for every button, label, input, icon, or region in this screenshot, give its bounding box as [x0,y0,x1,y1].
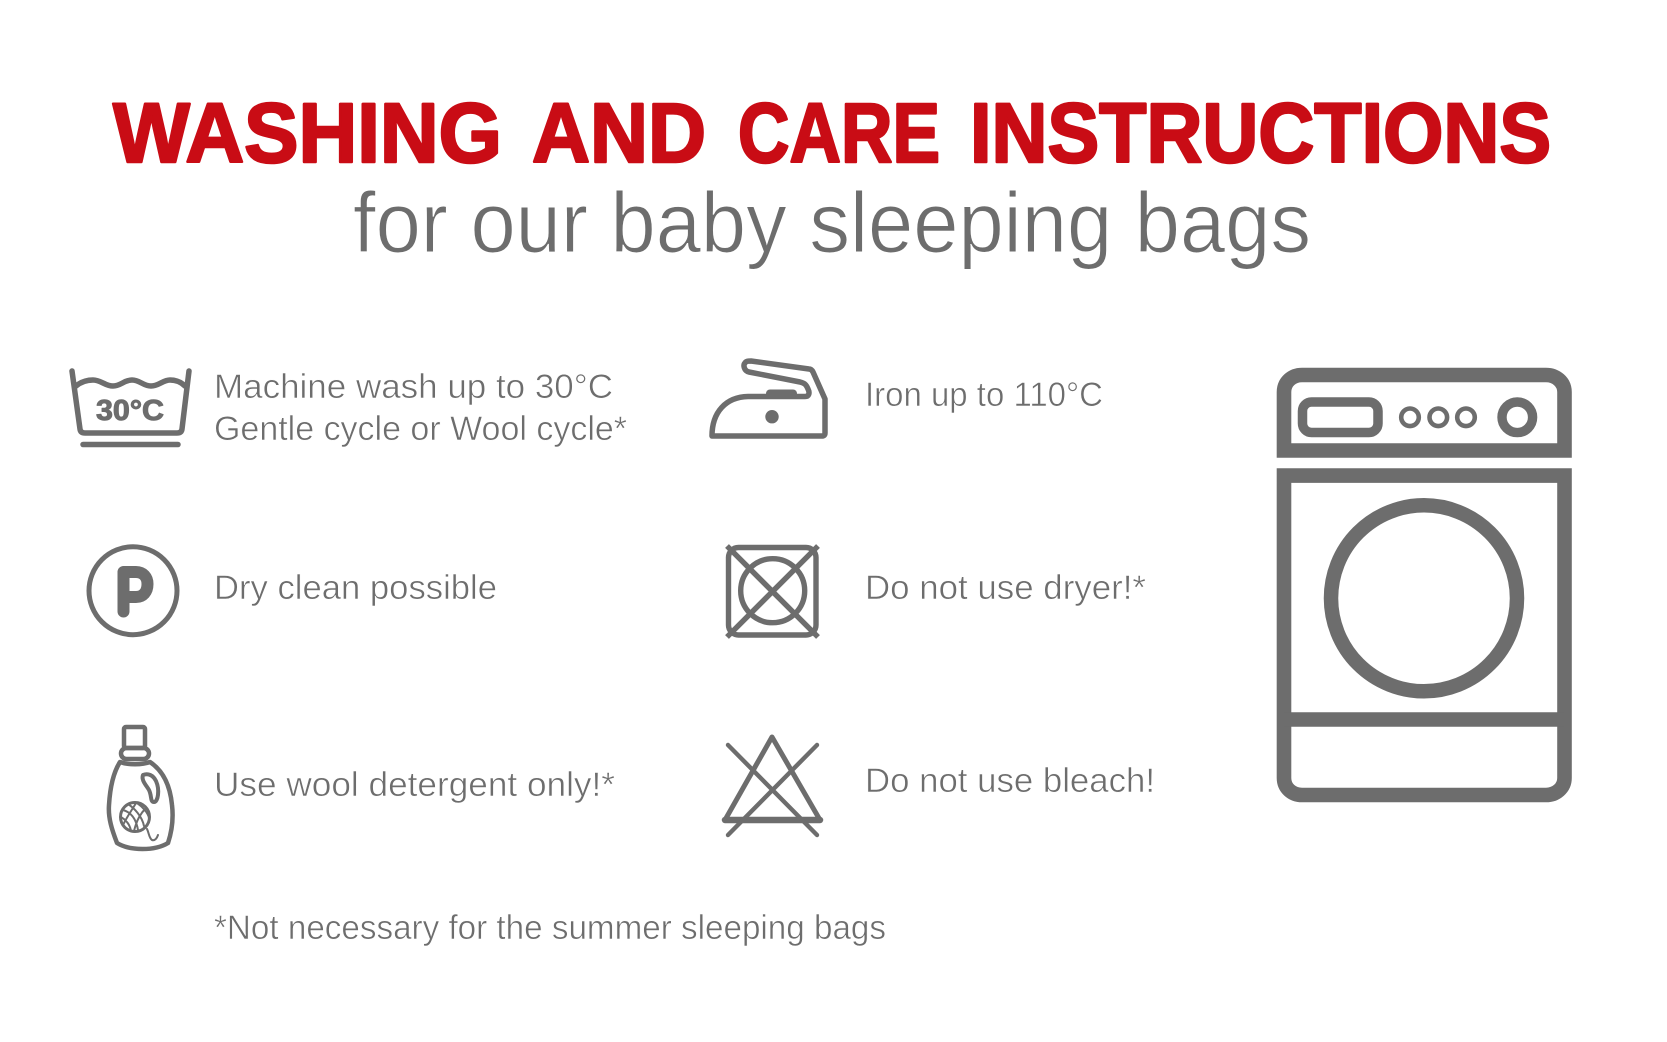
icon: wash tub 30°C [72,371,189,444]
subtitle: for our baby sleeping bags [353,176,1311,271]
footnote: *Not necessary for the summer sleeping bags [214,909,886,947]
icon: wool detergent bottle [109,727,173,849]
icon: iron [712,361,825,436]
text: machine wash [214,368,627,448]
title: CARE [738,86,940,180]
title: AND [532,86,706,180]
text: machine wash: Machine wash up to 30°C [214,368,613,406]
icon: no bleach [725,737,820,835]
title [113,86,1551,180]
text: iron: Iron up to 110°C [865,376,1103,414]
text: machine wash: Gentle cycle or Wool cycle* [214,410,627,448]
icon: no dryer [727,546,818,637]
text: wool detergent: Use wool detergent only!* [214,766,615,804]
text: dry clean: Dry clean possible [214,569,497,607]
icon: wash tub 30°C: 30°C [96,395,164,427]
icon: washing machine [1284,375,1564,795]
text: no bleach: Do not use bleach! [865,762,1155,800]
title: INSTRUCTIONS [970,86,1551,180]
text: no dryer: Do not use dryer!* [865,569,1146,607]
icon: dry clean P [89,547,177,635]
title: WASHING [113,86,502,180]
